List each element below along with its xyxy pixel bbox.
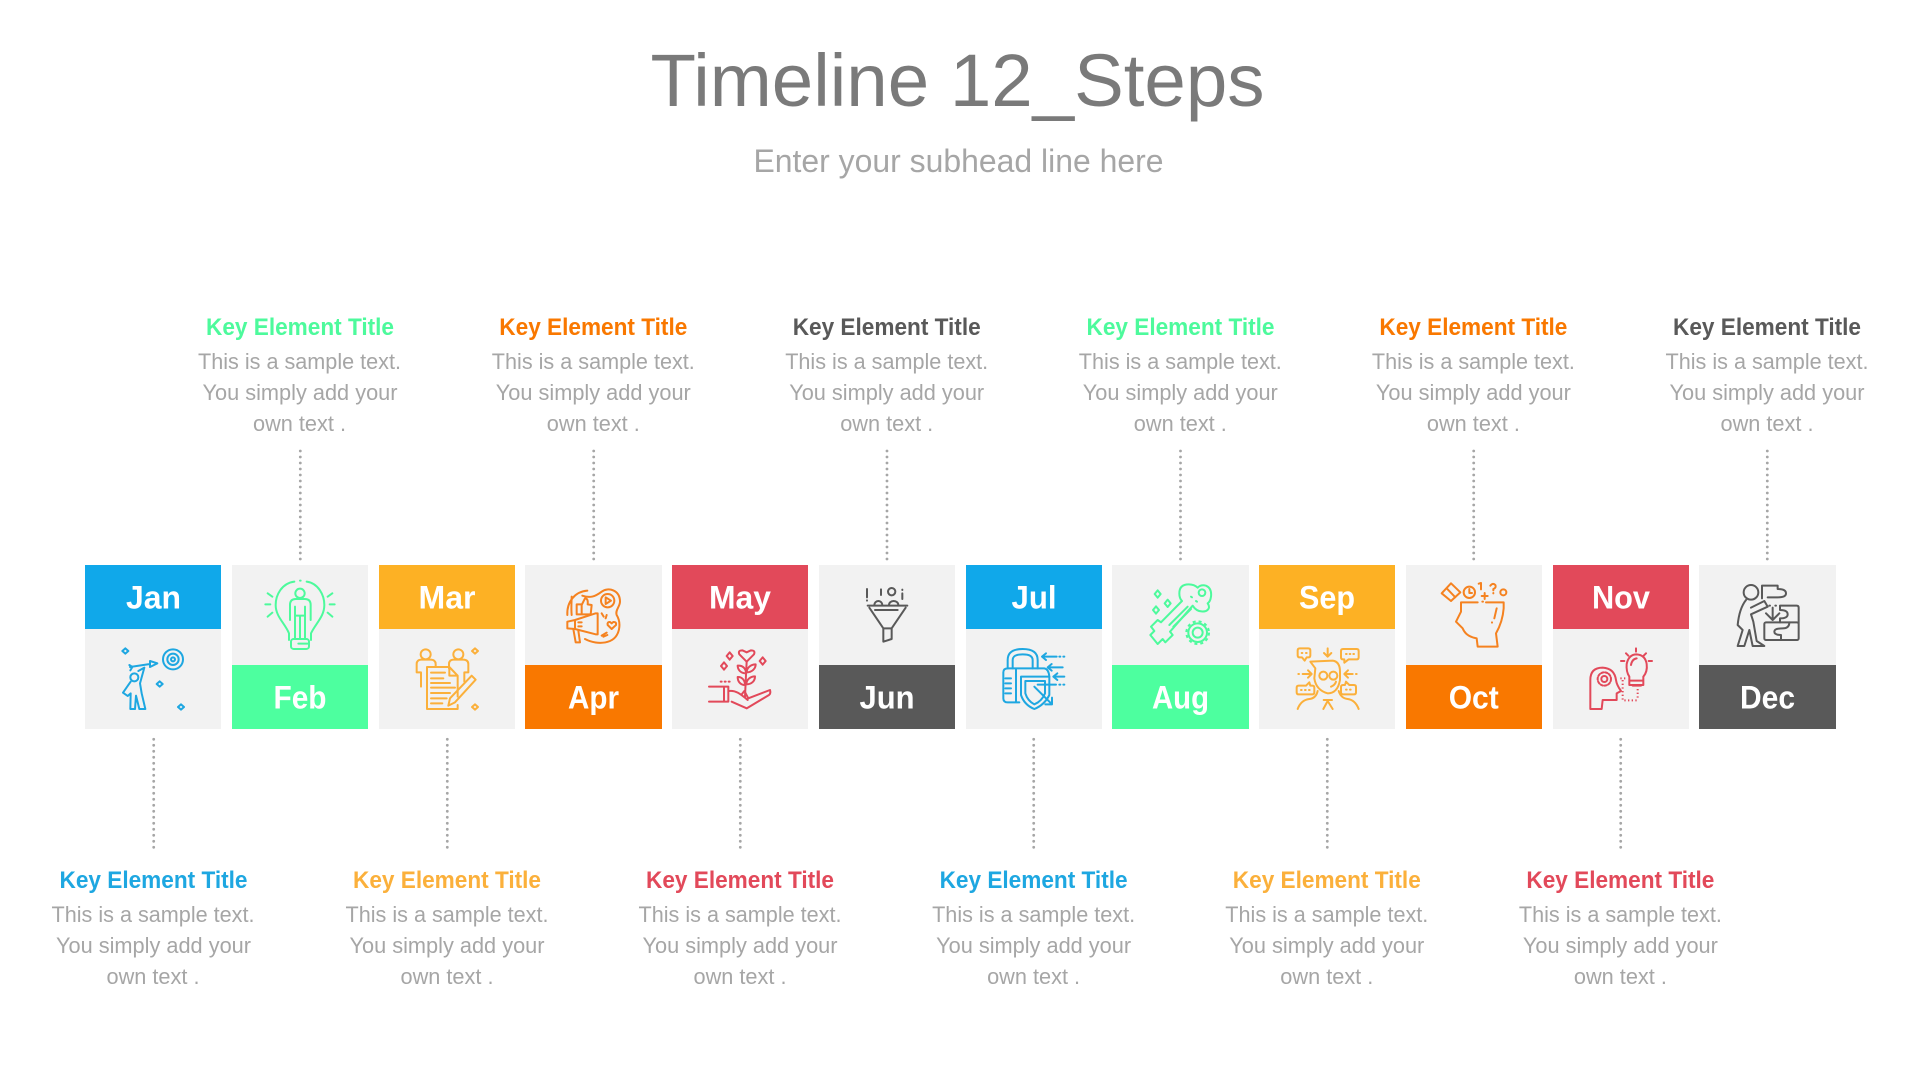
icon: person aiming arrow at target: [122, 648, 184, 710]
body line 1: This is a sample text.: [346, 902, 548, 927]
text block: [198, 314, 401, 436]
month label: Aug: [1152, 680, 1209, 716]
step: March: [346, 565, 548, 989]
icon: funnel: [867, 588, 907, 642]
card background: [1406, 565, 1542, 729]
text block: [1225, 867, 1428, 989]
card background: [232, 565, 368, 729]
element title: Key Element Title: [1673, 314, 1861, 341]
card background: [1259, 565, 1395, 729]
icon: megaphone and social media: [567, 589, 620, 643]
body line 1: This is a sample text.: [638, 902, 842, 927]
body line 1: This is a sample text.: [932, 902, 1135, 927]
month band: [1259, 565, 1395, 629]
body line 1: This is a sample text.: [52, 902, 254, 927]
month band: [1112, 665, 1249, 729]
body line 3: own text .: [547, 411, 640, 436]
step: January: [52, 565, 254, 989]
icon: head with ideas: [1442, 583, 1506, 647]
element title: Key Element Title: [1233, 867, 1421, 894]
element title: Key Element Title: [206, 314, 394, 341]
dotted connector: [592, 451, 595, 560]
month label: Feb: [274, 680, 326, 716]
step: September: [1225, 565, 1428, 989]
body line 2: You simply add your: [496, 380, 691, 405]
body line 1: This is a sample text.: [492, 349, 695, 374]
body line 1: This is a sample text.: [198, 349, 401, 374]
card background: [966, 565, 1102, 729]
text block: [1519, 867, 1722, 989]
element title: Key Element Title: [940, 867, 1128, 894]
dotted connector: [1619, 739, 1622, 848]
body line 3: own text .: [1134, 411, 1227, 436]
step: February: [198, 314, 401, 729]
step: June: [785, 314, 988, 729]
body line 3: own text .: [253, 411, 346, 436]
body line 3: own text .: [840, 411, 933, 436]
step: November: [1519, 565, 1722, 989]
month band: [85, 565, 221, 629]
text block: [52, 867, 254, 989]
element title: Key Element Title: [646, 867, 834, 894]
body line 2: You simply add your: [350, 933, 544, 958]
dotted connector: [152, 739, 155, 848]
element title: Key Element Title: [793, 314, 981, 341]
month band: [379, 565, 515, 629]
body line 2: You simply add your: [936, 933, 1131, 958]
body line 3: own text .: [400, 964, 494, 989]
card background: [525, 565, 662, 729]
text block: [932, 867, 1135, 989]
text block: [1079, 314, 1282, 436]
body line 1: This is a sample text.: [785, 349, 988, 374]
step: April: [492, 314, 695, 729]
body line 1: This is a sample text.: [1225, 902, 1428, 927]
icon: people and signed document: [417, 648, 478, 710]
icon: padlock and shield: [1003, 649, 1064, 709]
month label: Jun: [860, 680, 914, 716]
body line 3: own text .: [1720, 411, 1814, 436]
month band: [819, 665, 955, 729]
month label: Oct: [1449, 680, 1499, 716]
dotted connector: [1766, 451, 1769, 560]
month label: May: [709, 580, 771, 616]
body line 1: This is a sample text.: [1666, 349, 1868, 374]
month band: [966, 565, 1102, 629]
body line 2: You simply add your: [1523, 933, 1718, 958]
card background: [819, 565, 955, 729]
step: October: [1372, 314, 1575, 729]
month label: Jan: [126, 580, 181, 616]
month label: Nov: [1592, 580, 1650, 616]
card background: [1553, 565, 1689, 729]
card background: [1112, 565, 1249, 729]
card background: [85, 565, 221, 729]
body line 2: You simply add your: [1670, 380, 1864, 405]
body line 2: You simply add your: [1083, 380, 1278, 405]
dotted connector: [1032, 739, 1035, 848]
element title: Key Element Title: [1379, 314, 1567, 341]
step: July: [932, 565, 1135, 989]
dotted connector: [1326, 739, 1329, 848]
dotted connector: [1472, 451, 1475, 560]
title: Timeline 12_Steps: [650, 39, 1264, 122]
text block: [1372, 314, 1575, 436]
dotted connector: [1179, 451, 1182, 560]
month band: [525, 665, 662, 729]
icon: head with gear and light bulb: [1590, 648, 1652, 709]
body line 1: This is a sample text.: [1519, 902, 1722, 927]
month label: Dec: [1740, 680, 1795, 716]
body line 3: own text .: [694, 964, 786, 989]
body line 3: own text .: [1574, 964, 1667, 989]
body line 2: You simply add your: [56, 933, 251, 958]
card background: [379, 565, 515, 729]
month band: [672, 565, 808, 629]
body line 2: You simply add your: [202, 380, 398, 405]
icon: plant growing from hand: [709, 650, 770, 708]
dotted connector: [299, 451, 302, 560]
element title: Key Element Title: [353, 867, 541, 894]
body line 2: You simply add your: [642, 933, 838, 958]
month band: [1699, 665, 1836, 729]
month label: Mar: [418, 580, 476, 616]
element title: Key Element Title: [1086, 314, 1274, 341]
element title: Key Element Title: [499, 314, 687, 341]
body line 3: own text .: [1280, 964, 1373, 989]
card background: [1699, 565, 1836, 729]
body line 2: You simply add your: [1229, 933, 1424, 958]
text block: [1666, 314, 1868, 436]
element title: Key Element Title: [60, 867, 248, 894]
month label: Jul: [1012, 580, 1056, 616]
month band: [1406, 665, 1542, 729]
body line 3: own text .: [1427, 411, 1520, 436]
subtitle: Enter your subhead line here: [754, 143, 1164, 179]
icon: person fitting puzzle pieces: [1738, 585, 1799, 646]
element title: Key Element Title: [1526, 867, 1714, 894]
icon: person in light bulb: [265, 581, 335, 649]
text block: [785, 314, 988, 436]
step: December: [1666, 314, 1868, 729]
body line 2: You simply add your: [1376, 380, 1571, 405]
dotted connector: [739, 739, 742, 848]
dotted connector: [446, 739, 449, 848]
card background: [672, 565, 808, 729]
text block: [346, 867, 548, 989]
step: August: [1079, 314, 1282, 729]
body line 3: own text .: [987, 964, 1080, 989]
body line 1: This is a sample text.: [1372, 349, 1575, 374]
month band: [232, 665, 368, 729]
month band: [1553, 565, 1689, 629]
dotted connector: [886, 451, 888, 560]
text block: [638, 867, 842, 989]
body line 1: This is a sample text.: [1079, 349, 1282, 374]
month label: Apr: [568, 680, 619, 716]
step: May: [638, 565, 842, 989]
text block: [492, 314, 695, 436]
month label: Sep: [1299, 580, 1355, 616]
body line 3: own text .: [106, 964, 200, 989]
icon: face with speech bubbles: [1297, 648, 1359, 709]
icon: key and gear: [1150, 584, 1211, 644]
body line 2: You simply add your: [789, 380, 984, 405]
